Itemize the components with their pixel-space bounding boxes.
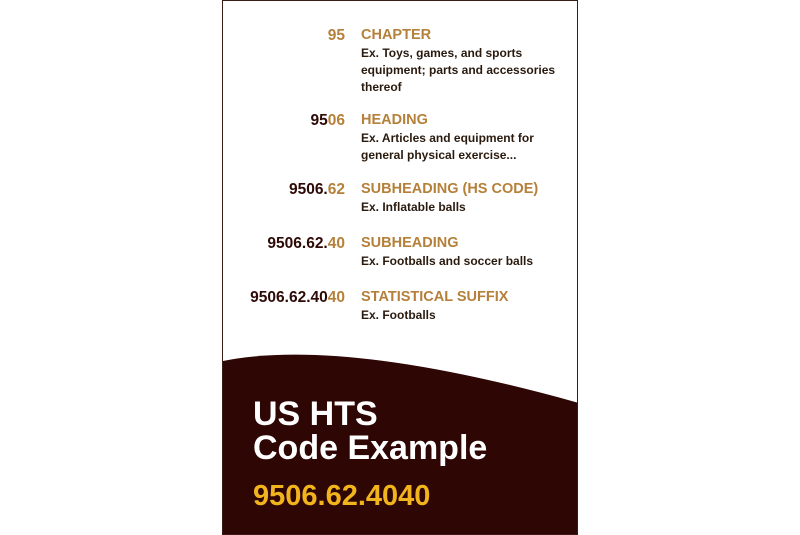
title: [253, 395, 487, 467]
card: 9506: [310, 112, 345, 129]
card: Ex. Footballs: [361, 308, 436, 322]
row: statistical suffix: [250, 289, 508, 322]
example code: 9506.62.4040: [253, 480, 430, 512]
card: 9506.62: [289, 181, 345, 198]
row: subheading hs code: [289, 181, 538, 214]
row: chapter: [328, 27, 555, 94]
title: Code Example: [253, 429, 487, 467]
title: US HTS: [253, 395, 378, 433]
card: 95: [328, 27, 345, 44]
card: STATISTICAL SUFFIX: [361, 289, 508, 305]
card: SUBHEADING: [361, 235, 458, 251]
card: Ex. Footballs and soccer balls: [361, 254, 533, 268]
card: [222, 0, 578, 535]
row: heading: [310, 112, 534, 162]
card: Ex. Inflatable balls: [361, 200, 466, 214]
row: subheading: [267, 235, 533, 268]
card: 9506.62.4040: [250, 289, 345, 306]
card: SUBHEADING (HS CODE): [361, 181, 538, 197]
card: Ex. Toys, games, and sports equipment; parts and accessories thereof: [361, 46, 555, 94]
card: 9506.62.40: [267, 235, 345, 252]
card: Ex. Articles and equipment for general physical exercise...: [361, 131, 534, 162]
dark curved footer: [223, 354, 577, 534]
card: HEADING: [361, 112, 428, 128]
card: CHAPTER: [361, 27, 431, 43]
